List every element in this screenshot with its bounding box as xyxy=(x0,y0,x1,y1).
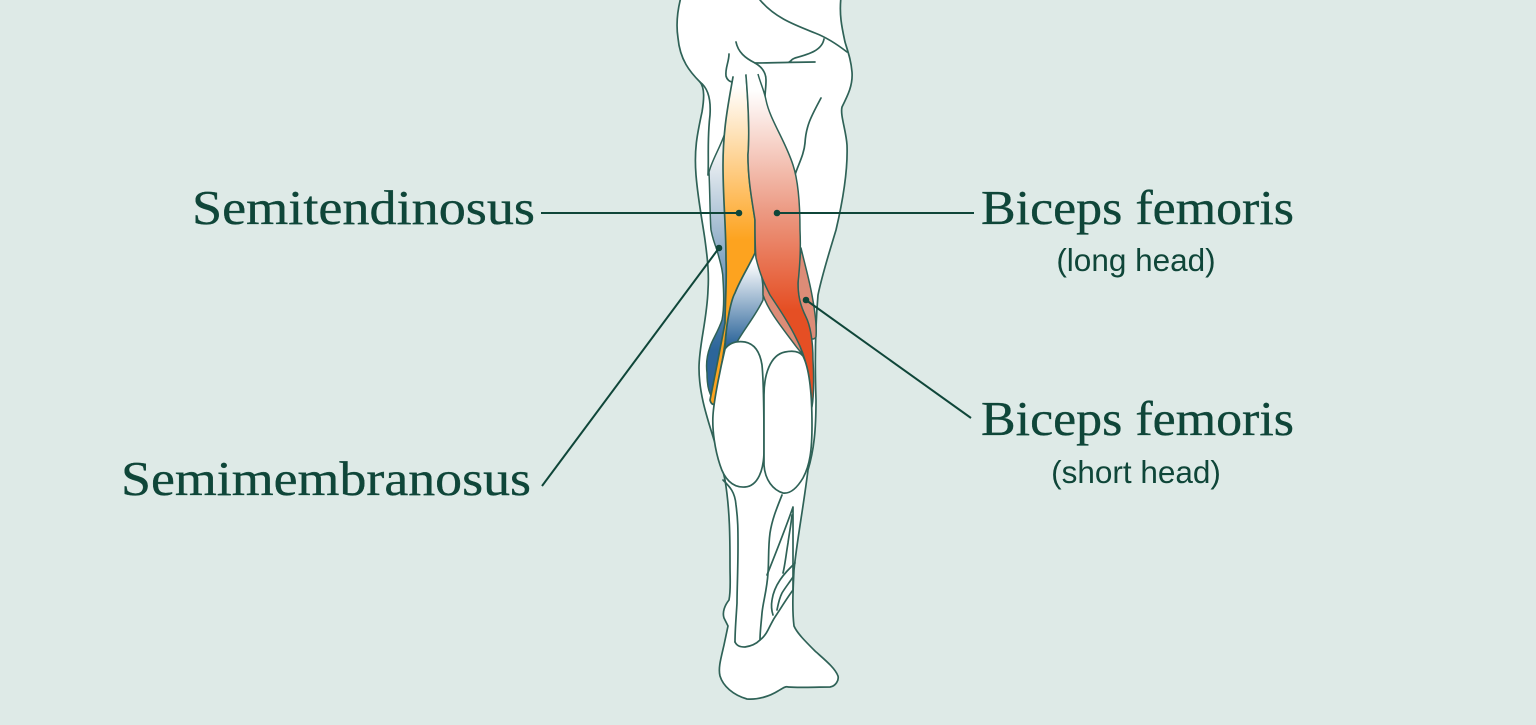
muscle: semitendinosus, orange xyxy=(710,75,755,404)
leader: biceps femoris short head xyxy=(803,297,971,418)
label: Biceps femoris short head xyxy=(981,391,1294,490)
leader: biceps femoris long head xyxy=(774,210,974,216)
muscle: biceps femoris short head, upper piece xyxy=(798,248,816,339)
label: Biceps femoris long head: Biceps femoris xyxy=(981,180,1294,235)
muscle: biceps femoris long head, red xyxy=(746,74,814,407)
calf muscle right xyxy=(764,351,812,493)
calf muscle left xyxy=(713,342,764,487)
label: Semimembranosus: Semimembranosus xyxy=(121,451,531,506)
upper body contour lines xyxy=(700,0,847,175)
leader: semimembranosus xyxy=(542,245,722,486)
muscle: biceps femoris short head, lower piece xyxy=(763,280,804,357)
leader: semitendinosus xyxy=(541,210,742,216)
leg outline xyxy=(677,0,852,699)
leg figure xyxy=(677,0,852,699)
muscle: semimembranosus upper, blue xyxy=(707,133,730,397)
label: Semitendinosus: Semitendinosus xyxy=(192,180,535,235)
muscle: semimembranosus lower, blue xyxy=(725,253,763,348)
label: Biceps femoris short head: Biceps femoris xyxy=(981,391,1294,446)
label: Biceps femoris long head: (long head) xyxy=(1056,242,1216,278)
label: Biceps femoris long head xyxy=(981,180,1294,278)
label: Biceps femoris short head: (short head) xyxy=(1051,454,1221,490)
lower leg tendons xyxy=(723,480,795,647)
